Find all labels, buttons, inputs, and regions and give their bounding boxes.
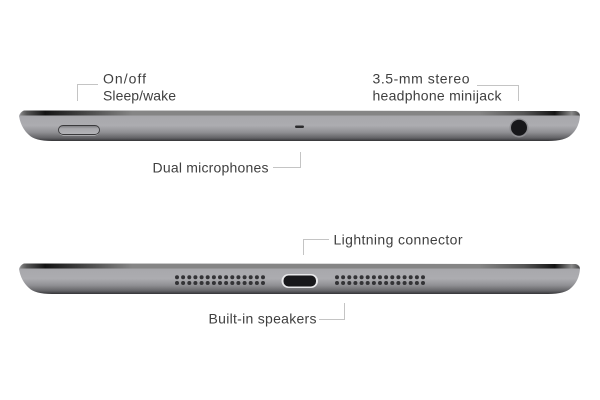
microphone hole — [295, 126, 304, 128]
leader line: minijack — [477, 86, 518, 101]
top edge of tablet — [19, 110, 580, 141]
label: on/off: On/off — [103, 70, 146, 86]
dark upper rim: bottom edge — [20, 264, 580, 268]
leader line: speakers — [319, 303, 344, 320]
label: stereo: 3.5-mm stereo — [372, 70, 470, 86]
label: built-in speakers: Built-in speakers — [208, 310, 316, 326]
tablet body: bottom edge — [19, 264, 580, 294]
left speaker grille — [175, 275, 265, 285]
sleep/wake button — [58, 126, 100, 136]
callout: on/off sleep/wake — [78, 70, 176, 104]
bottom edge of tablet — [19, 264, 580, 294]
callout: dual microphones — [152, 152, 300, 176]
label: dual microphones: Dual microphones — [152, 160, 268, 176]
leader line: on/off — [78, 84, 98, 101]
leader line: lightning — [304, 240, 329, 255]
callout: built-in speakers — [208, 303, 344, 326]
callout: lightning connector — [304, 232, 463, 255]
label: headphone minijack: headphone minijack — [372, 88, 502, 104]
right speaker grille — [335, 275, 425, 285]
tablet body: top edge — [19, 110, 580, 141]
lightning port — [282, 274, 318, 288]
leader line: microphones — [273, 152, 300, 168]
callout: headphone minijack — [372, 70, 518, 104]
label: sleep/wake: Sleep/wake — [103, 88, 176, 104]
label: lightning connector: Lightning connector — [334, 232, 463, 248]
dark upper rim: top edge — [20, 110, 580, 116]
headphone jack — [510, 118, 528, 138]
